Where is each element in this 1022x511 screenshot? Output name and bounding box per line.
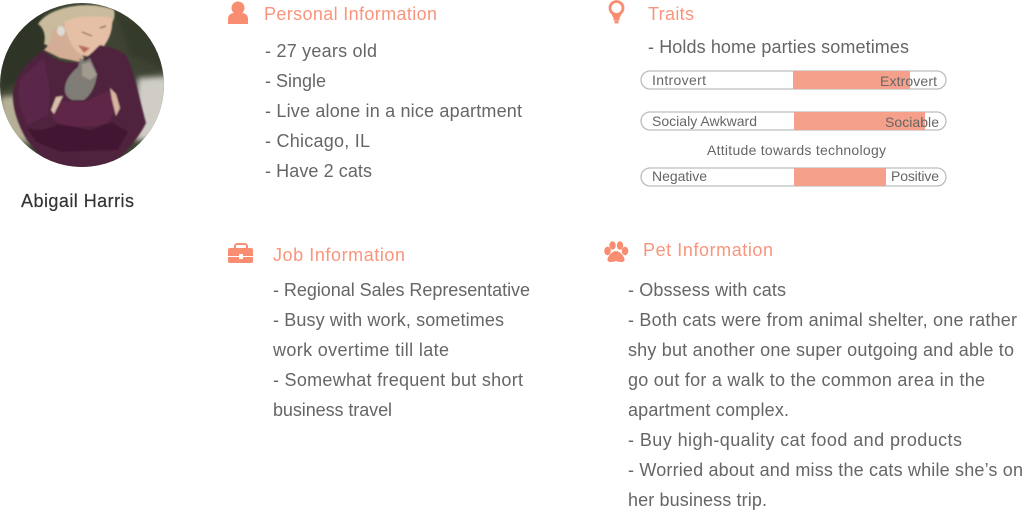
- text block: pet details: go out for a walk to the common area in the: [628, 370, 985, 390]
- panel: pet information: [604, 240, 1022, 510]
- text block: personal details: - 27 years old: [265, 41, 377, 61]
- text block: pet details: [628, 280, 1022, 510]
- sweater: [13, 45, 146, 168]
- panel: job information: [228, 243, 530, 420]
- cat: [65, 58, 97, 100]
- text block: job details: - Somewhat frequent but short: [273, 370, 523, 390]
- hair: [38, 5, 115, 48]
- face: [64, 16, 112, 56]
- hands: [110, 88, 120, 116]
- text block: pet details: shy but another one super outgoing and able to: [628, 340, 1014, 360]
- slider: socially awkward to sociable: Sociable: [885, 114, 939, 130]
- text block: pet details: - Obssess with cats: [628, 280, 786, 300]
- text block: pet details: - Buy high-quality cat food and products: [628, 430, 962, 450]
- text block: pet details: - Both cats were from animal shelter, one rather: [628, 310, 1017, 330]
- text block: job details: - Regional Sales Representative: [273, 280, 530, 300]
- slider: introvert to extrovert: Extrovert: [880, 73, 937, 89]
- neck: [44, 24, 84, 62]
- text block: pet details: - Worried about and miss the cats while she’s on: [628, 460, 1022, 480]
- slider: introvert to extrovert: [641, 71, 946, 89]
- text block: pet details: her business trip.: [628, 490, 767, 510]
- panel: traits: [610, 2, 946, 186]
- earring: [57, 26, 65, 36]
- heading: personal information: Personal Information: [264, 4, 437, 24]
- text block: personal details: - Chicago, IL: [265, 131, 370, 151]
- heading: job information: Job Information: [273, 245, 405, 265]
- text block: personal details: - Single: [265, 71, 326, 91]
- heading: traits: Traits: [648, 4, 694, 24]
- slider: socially awkward to sociable: Socialy Awkward: [652, 113, 757, 129]
- slider: introvert to extrovert: Introvert: [652, 72, 706, 88]
- near arm: [52, 91, 116, 127]
- text block: job details: [272, 280, 530, 420]
- text block: personal details: - Live alone in a nice apartment: [265, 101, 522, 121]
- icon: paw: [604, 241, 628, 262]
- text block: job details: - Busy with work, sometimes: [273, 310, 504, 330]
- slider: negative to positive: Negative: [652, 168, 707, 184]
- icon: light bulb: [610, 2, 623, 22]
- slider: negative to positive: [641, 168, 946, 186]
- text block: personal details: - Have 2 cats: [265, 161, 372, 181]
- text block: job details: work overtime till late: [272, 340, 449, 360]
- icon: briefcase: [228, 243, 253, 263]
- icon: person: [228, 2, 248, 24]
- text: holds home parties: - Holds home parties sometimes: [648, 37, 909, 57]
- profile photo: woman holding a cat: [0, 0, 170, 170]
- heading: pet information: Pet Information: [643, 240, 773, 260]
- label: attitude towards technology: Attitude towards technology: [707, 142, 886, 158]
- panel: personal information: [228, 2, 522, 181]
- text block: personal details: [265, 41, 522, 181]
- slider: socially awkward to sociable: [641, 112, 946, 130]
- name: Abigail Harris: Abigail Harris: [21, 191, 134, 211]
- slider: negative to positive: Positive: [891, 168, 939, 184]
- text block: job details: business travel: [273, 400, 392, 420]
- text block: pet details: apartment complex.: [628, 400, 789, 420]
